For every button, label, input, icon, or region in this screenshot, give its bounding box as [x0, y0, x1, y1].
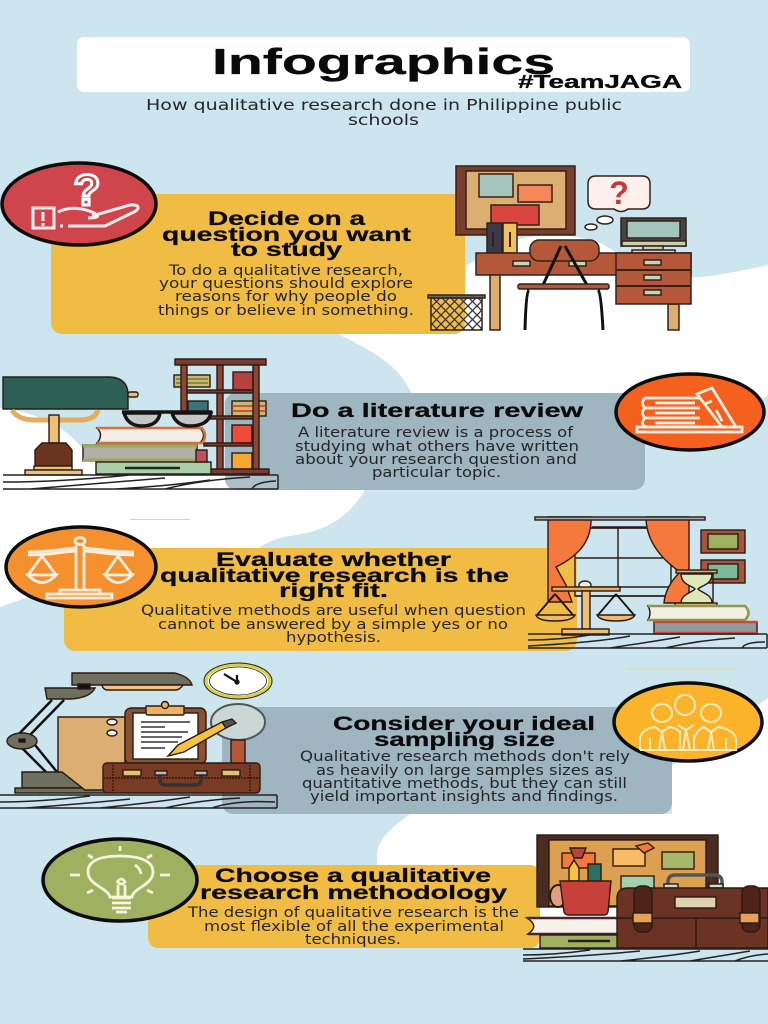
text: step 4 body: as heavily on large samples sizes as — [316, 763, 613, 779]
text: step 1 body: To do a qualitative research, — [168, 263, 403, 279]
clock — [204, 663, 272, 699]
text: step 4 body: Qualitative research methods don't rely — [300, 749, 630, 765]
icon: balance scale — [6, 527, 156, 607]
picture frames — [701, 530, 745, 583]
heading: step 2: Do a literature review — [291, 400, 584, 422]
icon: hand with question mark: ? — [74, 166, 100, 215]
text: step 1 body: reasons for why people do — [175, 289, 397, 305]
text: step 5 body — [187, 905, 519, 948]
text: step 5 body: The design of qualitative research is the — [187, 905, 519, 921]
hourglass — [675, 570, 717, 606]
bookshelf — [174, 359, 269, 474]
cork board — [537, 835, 718, 907]
clipboard — [125, 702, 206, 764]
text: step 3 body: Qualitative methods are useful when question — [141, 603, 526, 619]
icon: group of people — [614, 683, 762, 761]
text: step 5 body: techniques. — [305, 932, 401, 948]
pencil — [168, 719, 236, 756]
illustration: cork board, mug, books and briefcase — [527, 835, 768, 948]
subtitle: How qualitative research done in Philippine public — [146, 96, 622, 114]
text: step 4 body: yield important insights and findings. — [310, 789, 618, 805]
panel: step 5 choose methodology — [148, 865, 540, 948]
desk lamp — [3, 377, 138, 475]
floor 3 — [0, 795, 277, 808]
panel: step 3 evaluate fit — [64, 548, 577, 651]
text: step 4 body: quantitative methods, but they can still — [302, 776, 627, 792]
text: step 3 body: cannot be answered by a simple yes or no — [158, 617, 508, 633]
heading: step 5: research methodology — [200, 882, 507, 904]
heading: step 4: Consider your ideal — [333, 713, 595, 735]
panel: step 4 sampling size — [222, 707, 672, 814]
floor 2 — [528, 634, 767, 648]
illustration: bankers lamp, books and shelf — [3, 359, 269, 475]
curtains — [535, 517, 705, 603]
heading: step 5: Choose a qualitative — [215, 865, 491, 887]
text: step 1 body: things or believe in something. — [158, 303, 414, 319]
window — [575, 528, 671, 596]
balance scale — [536, 581, 635, 635]
text: step 2 body: studying what others have written — [295, 439, 579, 455]
suitcase — [103, 763, 260, 793]
icon: hand with question mark — [2, 163, 156, 245]
text: step 2 body: about your research question and — [295, 452, 577, 468]
heading: step 1: to study — [231, 239, 342, 261]
text: step 2 body: particular topic. — [372, 465, 501, 481]
lamp — [7, 673, 192, 793]
panel: step 2 literature review — [225, 393, 645, 490]
envelope — [58, 717, 125, 790]
subtitle: schools — [348, 111, 419, 129]
text: step 2 body — [295, 425, 579, 481]
illustration: desk lamp, envelope, clipboard and suitcase — [7, 663, 272, 793]
floor 4 — [523, 949, 768, 961]
text: step 3 body: hypothesis. — [286, 630, 381, 646]
title: Infographics — [212, 41, 555, 82]
text: step 1 body — [158, 263, 414, 319]
illustration: window with curtains, scales and hourglass — [535, 517, 757, 635]
thought bubble: ? — [609, 175, 629, 211]
heading: step 1: question you want — [162, 224, 412, 246]
text: step 1 body: your questions should explore — [159, 276, 413, 292]
glasses — [122, 412, 212, 426]
illustration: desk with cork board — [428, 166, 691, 330]
heading: step 3 — [160, 549, 509, 602]
stack of books — [83, 428, 211, 474]
magnifying glass — [211, 704, 265, 764]
icon: stack of books — [616, 374, 764, 450]
briefcase — [617, 875, 768, 948]
mug — [550, 881, 611, 915]
thought bubble — [585, 175, 650, 230]
title card — [77, 37, 690, 92]
panel: step 1 decide on a question — [51, 194, 465, 334]
floor 1 — [3, 475, 278, 489]
books — [527, 918, 638, 948]
team tag: #TeamJAGA — [518, 72, 682, 92]
text: step 4 body — [300, 749, 630, 805]
heading: step 4 — [333, 713, 595, 751]
heading: step 4: sampling size — [374, 729, 555, 751]
heading: step 3: qualitative research is the — [160, 565, 509, 587]
pencil and pen — [569, 860, 601, 882]
heading: step 1 — [162, 208, 412, 261]
subtitle — [146, 96, 622, 129]
text: step 5 body: most flexible of all the experimental — [204, 919, 504, 935]
heading: step 3: Evaluate whether — [216, 549, 452, 571]
heading: step 1: Decide on a — [208, 208, 365, 230]
heading: step 3: right fit. — [279, 580, 388, 602]
books — [648, 606, 757, 634]
text: step 2 body: A literature review is a process of — [298, 425, 574, 441]
heading: step 5 — [200, 865, 507, 904]
text: step 3 body — [141, 603, 526, 646]
icon: light bulb — [43, 839, 197, 921]
